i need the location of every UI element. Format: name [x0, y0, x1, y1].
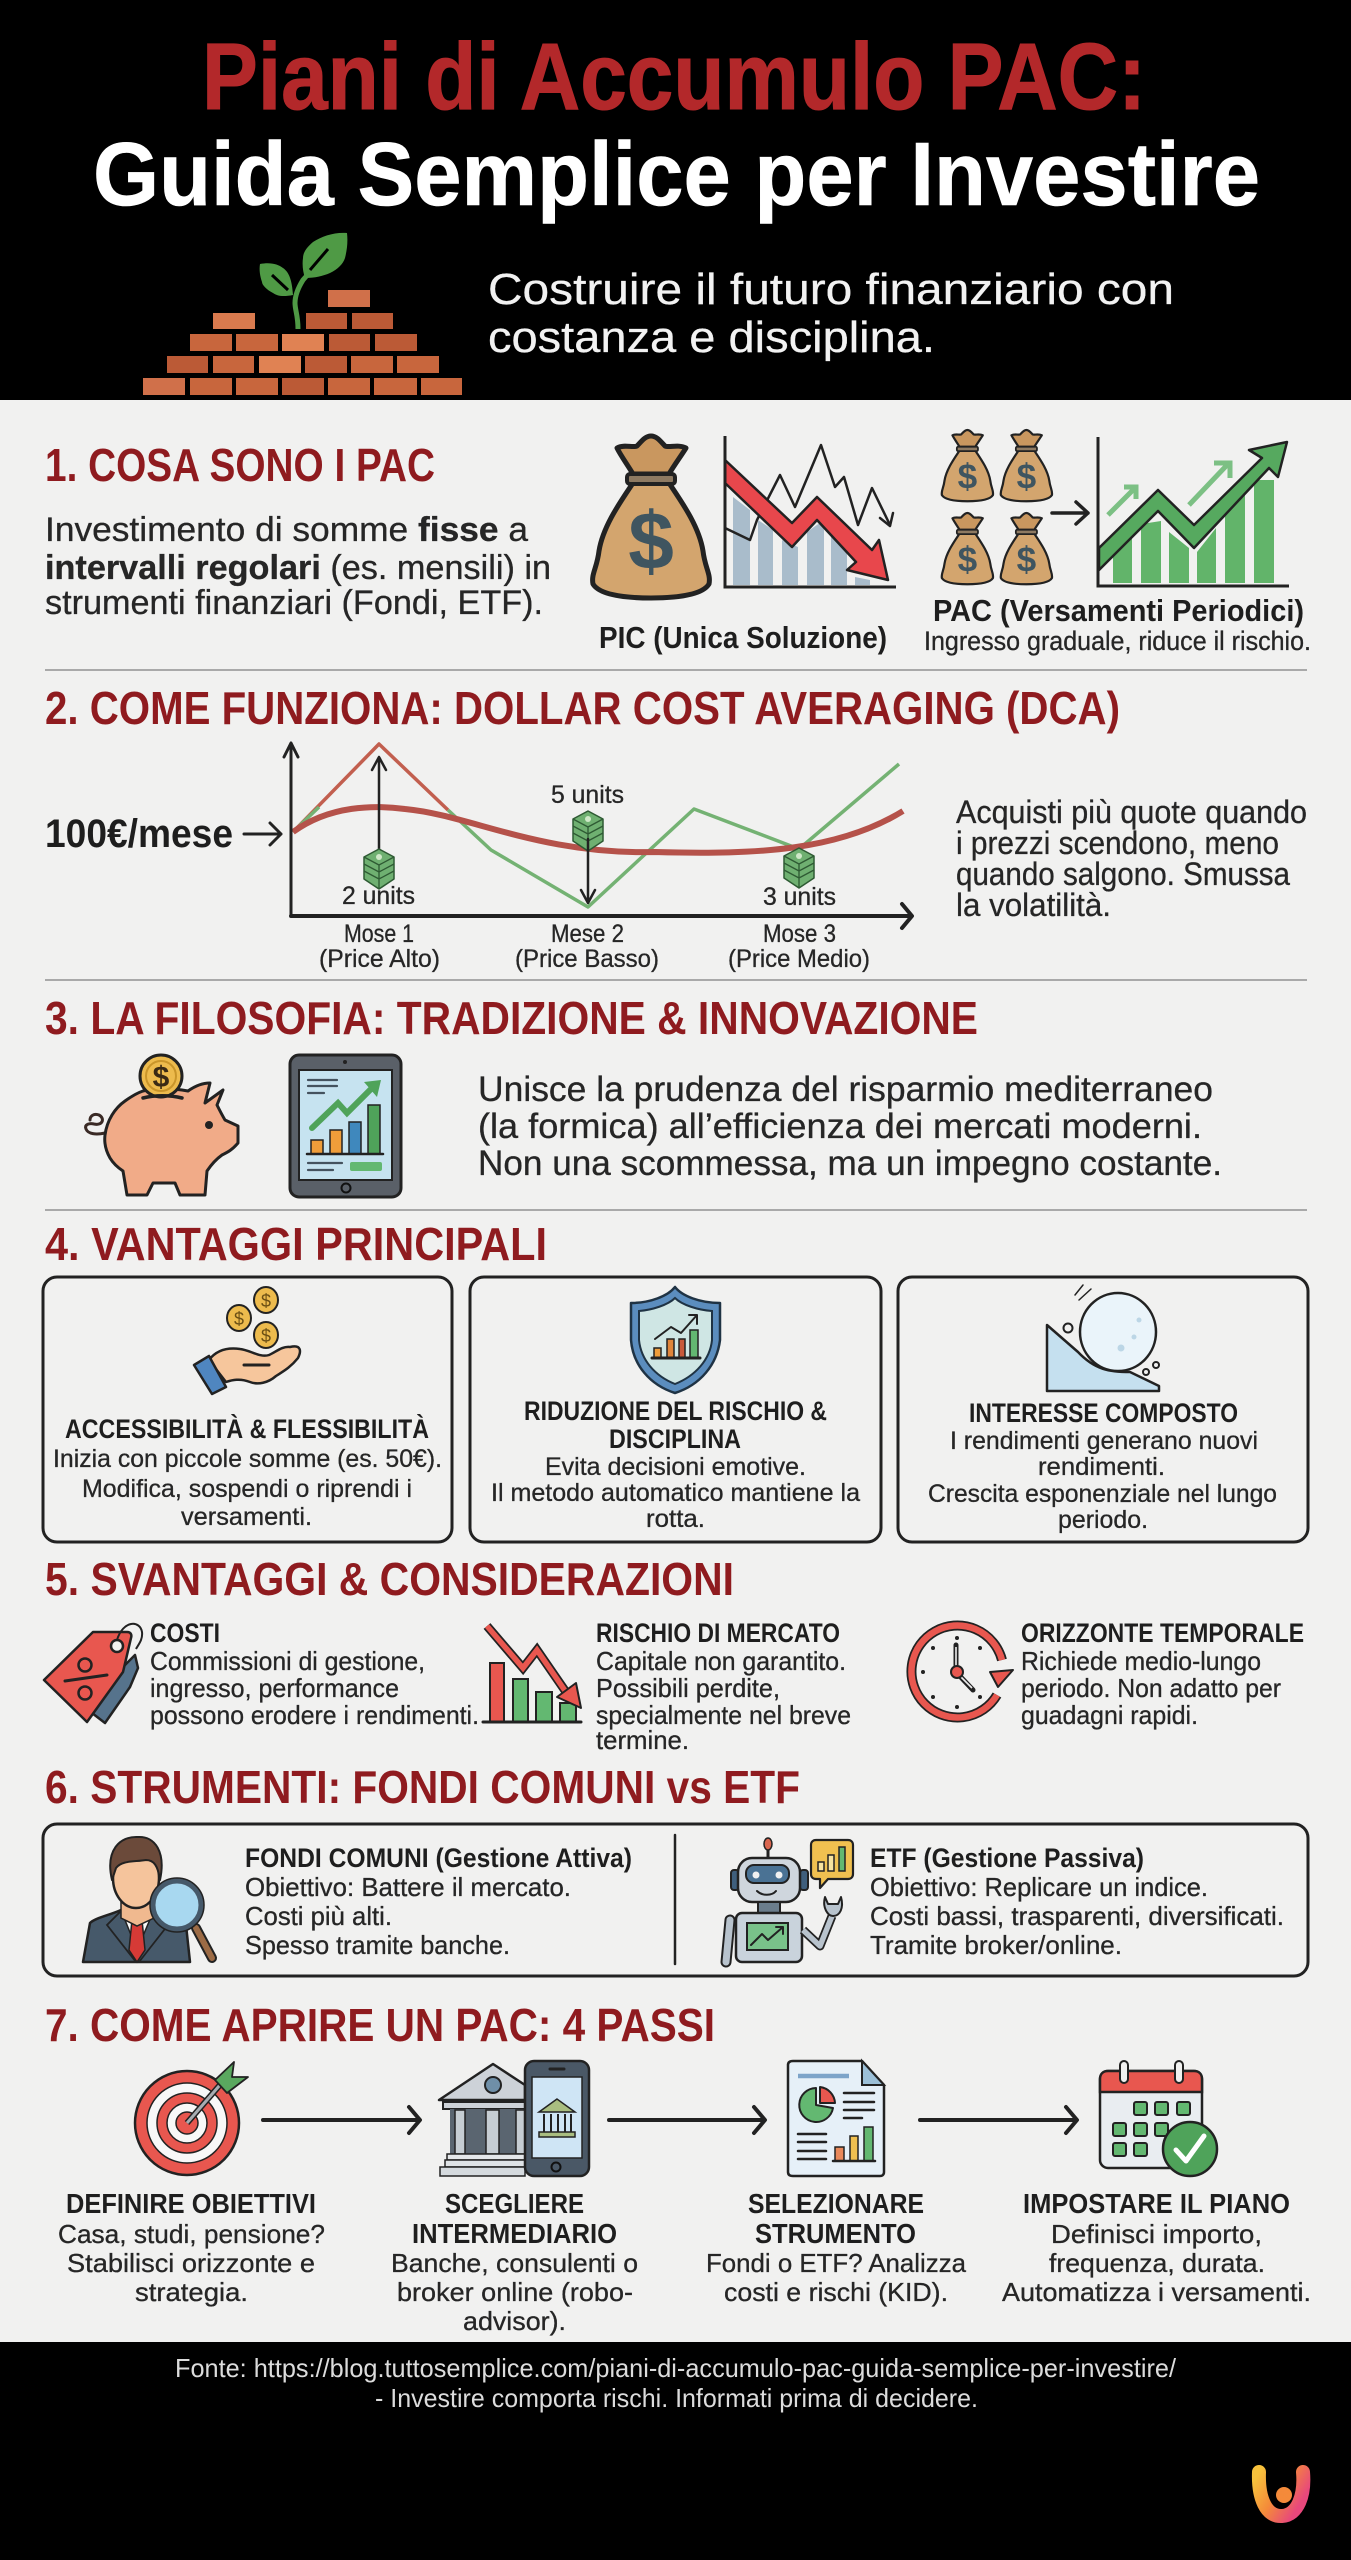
icon: bank and smartphone — [439, 2061, 589, 2176]
month 2 marker — [551, 781, 624, 903]
panel: 1 cosa sono i PAC — [45, 430, 1311, 656]
heading 7: 7. COME APRIRE UN PAC: 4 PASSI — [45, 1999, 715, 2051]
arrow: into chart — [244, 823, 281, 845]
card text: Il metodo automatico mantiene la — [491, 1479, 860, 1507]
arrow: step 2 to 3 — [609, 2107, 765, 2133]
rischio text: termine. — [596, 1725, 689, 1755]
philosophy text: Non una scommessa, ma un impegno costante. — [478, 1144, 1222, 1183]
step 1 text — [58, 2188, 325, 2307]
step 3 text: SELEZIONARE — [748, 2188, 924, 2219]
step 2 text: SCEGLIERE — [445, 2188, 584, 2219]
icon: bricks with sprout — [143, 233, 462, 395]
card text: versamenti. — [181, 1503, 312, 1531]
axis labels — [319, 920, 870, 973]
subtitle: Costruire il futuro finanziario con — [488, 265, 1174, 314]
costi text: possono erodere i rendimenti. — [150, 1700, 479, 1730]
philosophy text — [478, 1070, 1222, 1183]
icon: tablet with chart — [290, 1055, 401, 1197]
title — [93, 24, 1260, 225]
header band — [0, 0, 1351, 400]
step 4 text: IMPOSTARE IL PIANO — [1023, 2188, 1290, 2219]
rischio text: Capitale non garantito. — [596, 1646, 846, 1676]
fondi text: Obiettivo: Battere il mercato. — [245, 1872, 571, 1902]
step 3 text: STRUMENTO — [755, 2218, 916, 2249]
icon: document with charts — [788, 2061, 884, 2176]
ETF text: Obiettivo: Replicare un indice. — [870, 1872, 1208, 1902]
step 1 text: strategia. — [135, 2277, 248, 2307]
panel: 5 svantaggi — [44, 1553, 1304, 1755]
label PIC: PIC (Unica Soluzione) — [599, 620, 887, 655]
step 4 text: frequenza, durata. — [1049, 2248, 1265, 2278]
panel: 2 come funziona — [45, 682, 1307, 973]
month 3 marker — [763, 848, 836, 911]
axis labels: (Price Basso) — [515, 945, 659, 973]
icon: piggy bank — [86, 1055, 238, 1195]
source text: Fonte: https://blog.tuttosemplice.com/piani-di-accumulo-pac-guida-semplice-per-investire/ — [175, 2353, 1177, 2383]
month 1 marker — [342, 757, 415, 910]
step 1 text: Stabilisci orizzonte e — [67, 2248, 315, 2278]
icon: snowball — [1047, 1285, 1159, 1391]
chart: rising market — [1098, 437, 1289, 586]
step 2 text: advisor). — [463, 2306, 566, 2336]
source text — [175, 2353, 1177, 2413]
chart: DCA line chart — [284, 743, 912, 928]
footer band — [0, 2342, 1351, 2560]
panel: 4 vantaggi principali — [43, 1218, 1308, 1542]
ETF text: Costi bassi, trasparenti, diversificati. — [870, 1901, 1284, 1931]
ETF text: Tramite broker/online. — [870, 1930, 1122, 1960]
definition text: Investimento di somme fisse a — [45, 511, 528, 549]
card text: ACCESSIBILITÀ & FLESSIBILITÀ — [65, 1413, 429, 1444]
ETF text: ETF (Gestione Passiva) — [870, 1843, 1144, 1873]
orizzonte text: guadagni rapidi. — [1021, 1700, 1198, 1730]
step 3 text — [706, 2188, 967, 2307]
card text: I rendimenti generano nuovi — [950, 1427, 1258, 1455]
step 4 text: Automatizza i versamenti. — [1002, 2277, 1311, 2307]
card text: Modifica, sospendi o riprendi i — [82, 1475, 412, 1503]
subtitle — [488, 265, 1174, 362]
costi text: ingresso, performance — [150, 1673, 399, 1703]
icon: analyst with magnifier — [83, 1837, 212, 1962]
card text — [928, 1398, 1277, 1534]
step 2 text: Banche, consulenti o — [391, 2248, 638, 2278]
axis labels: (Price Medio) — [728, 945, 870, 973]
fondi text: Costi più alti. — [245, 1901, 392, 1931]
icon: big money bag — [593, 436, 709, 598]
subtitle: costanza e disciplina. — [488, 313, 935, 362]
icon: hand with coins — [194, 1287, 300, 1394]
card text: INTERESSE COMPOSTO — [969, 1398, 1238, 1428]
card text: RIDUZIONE DEL RISCHIO & — [524, 1396, 827, 1426]
logo — [1259, 2472, 1303, 2516]
card text: rendimenti. — [1038, 1453, 1165, 1481]
card: riduzione del rischio — [470, 1277, 881, 1542]
definition text: intervalli regolari (es. mensili) in — [45, 549, 551, 587]
orizzonte text: periodo. Non adatto per — [1021, 1673, 1281, 1703]
arrow: bags to chart — [1052, 502, 1088, 524]
definition text — [45, 511, 551, 622]
comparison card — [43, 1824, 1308, 1976]
icon: hand with coins: $ — [234, 1309, 244, 1329]
label PAC: PAC (Versamenti Periodici) — [933, 593, 1304, 628]
orizzonte text — [1021, 1618, 1304, 1730]
heading 5: 5. SVANTAGGI & CONSIDERAZIONI — [45, 1553, 734, 1605]
explanation text: quando salgono. Smussa — [956, 856, 1290, 892]
step 2 text: INTERMEDIARIO — [412, 2218, 617, 2249]
source text: - Investire comporta rischi. Informati prima di decidere. — [375, 2383, 978, 2413]
icon: shield with chart — [631, 1287, 720, 1393]
card text — [53, 1413, 442, 1531]
philosophy text: Unisce la prudenza del risparmio mediterraneo — [478, 1070, 1213, 1109]
step 2 text — [391, 2188, 638, 2336]
rischio text: specialmente nel breve — [596, 1700, 851, 1730]
orizzonte text: Richiede medio-lungo — [1021, 1646, 1261, 1676]
ETF text — [870, 1843, 1284, 1960]
icon: four small money bags: $ — [1017, 458, 1037, 497]
step 3 text: costi e rischi (KID). — [724, 2277, 948, 2307]
axis labels: Mose 1 — [344, 920, 414, 948]
heading 2: 2. COME FUNZIONA: DOLLAR COST AVERAGING (DCA) — [45, 682, 1120, 734]
icon: hand with coins: $ — [261, 1291, 271, 1311]
icon: four small money bags: $ — [958, 541, 978, 580]
rischio text: RISCHIO DI MERCATO — [596, 1618, 840, 1648]
axis labels: Mose 3 — [763, 920, 836, 948]
icon: piggy bank: $ — [153, 1061, 170, 1094]
label PAC: Ingresso graduale, riduce il rischio. — [924, 626, 1311, 656]
card text — [491, 1396, 860, 1533]
heading 3: 3. LA FILOSOFIA: TRADIZIONE & INNOVAZIONE — [45, 992, 978, 1044]
card text: Inizia con piccole somme (es. 50€). — [53, 1445, 442, 1473]
heading 4: 4. VANTAGGI PRINCIPALI — [45, 1218, 547, 1270]
icon: hand with coins: $ — [261, 1326, 271, 1346]
month 3 marker: 3 units — [763, 883, 836, 911]
card: interesse composto — [898, 1277, 1308, 1542]
costi text: Commissioni di gestione, — [150, 1646, 425, 1676]
arrow: step 3 to 4 — [920, 2107, 1077, 2133]
icon: big money bag: $ — [628, 496, 674, 587]
orizzonte text: ORIZZONTE TEMPORALE — [1021, 1618, 1304, 1648]
label monthly amount: 100€/mese — [45, 812, 233, 856]
title: Piani di Accumulo PAC: — [202, 24, 1146, 130]
fondi text: Spesso tramite banche. — [245, 1930, 510, 1960]
costi text — [150, 1618, 479, 1730]
panel: 3 la filosofia — [45, 992, 1222, 1197]
fondi text: FONDI COMUNI (Gestione Attiva) — [245, 1843, 632, 1873]
explanation text: Acquisti più quote quando — [956, 794, 1307, 830]
card: accessibilità — [43, 1277, 452, 1542]
icon: four small money bags: $ — [1017, 541, 1037, 580]
step 1 text: Casa, studi, pensione? — [58, 2219, 325, 2249]
month 1 marker: 2 units — [342, 882, 415, 910]
fondi text — [245, 1843, 632, 1960]
explanation text — [956, 794, 1307, 923]
icon: falling bars — [483, 1626, 581, 1722]
month 2 marker: 5 units — [551, 781, 624, 809]
card text: rotta. — [646, 1505, 705, 1533]
arrow: step 1 to 2 — [263, 2107, 420, 2133]
title: Guida Semplice per Investire — [93, 125, 1260, 225]
icon: four small money bags — [942, 430, 1052, 584]
costi text: COSTI — [150, 1618, 220, 1648]
axis labels: Mese 2 — [551, 920, 624, 948]
explanation text: i prezzi scendono, meno — [956, 825, 1279, 861]
icon: four small money bags: $ — [958, 458, 978, 497]
card text: DISCIPLINA — [609, 1424, 741, 1454]
panel: 6 strumenti — [43, 1761, 1308, 1976]
icon: calendar with check — [1100, 2061, 1217, 2176]
card text: Crescita esponenziale nel lungo — [928, 1480, 1277, 1508]
step 2 text: broker online (robo- — [397, 2277, 633, 2307]
card text: periodo. — [1058, 1506, 1148, 1534]
definition text: strumenti finanziari (Fondi, ETF). — [45, 584, 543, 622]
heading 1: 1. COSA SONO I PAC — [45, 439, 435, 491]
step 4 text — [1002, 2188, 1311, 2307]
axis labels: (Price Alto) — [319, 945, 440, 973]
philosophy text: (la formica) all’efficienza dei mercati moderni. — [478, 1107, 1202, 1146]
step 3 text: Fondi o ETF? Analizza — [706, 2248, 967, 2278]
label PAC — [924, 593, 1311, 656]
heading 6: 6. STRUMENTI: FONDI COMUNI vs ETF — [45, 1761, 800, 1813]
icon: price tag — [44, 1624, 142, 1723]
icon: robot advisor — [726, 1838, 853, 1962]
card text: Evita decisioni emotive. — [545, 1453, 806, 1481]
rischio text — [596, 1618, 851, 1755]
icon: clock — [911, 1625, 1013, 1717]
icon: target — [135, 2062, 248, 2175]
panel: 7 come aprire un PAC — [45, 1999, 1311, 2336]
chart: falling market — [725, 436, 896, 587]
step 1 text: DEFINIRE OBIETTIVI — [66, 2188, 316, 2219]
step 4 text: Definisci importo, — [1051, 2219, 1262, 2249]
rischio text: Possibili perdite, — [596, 1673, 780, 1703]
explanation text: la volatilità. — [956, 887, 1111, 923]
